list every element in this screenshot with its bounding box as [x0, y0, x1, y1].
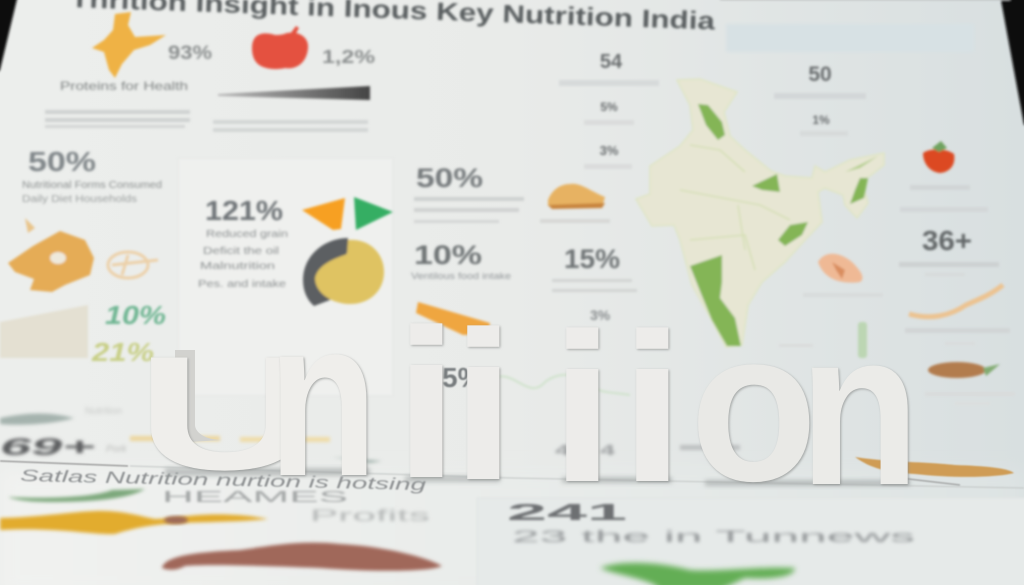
letter U: U: [136, 323, 317, 504]
top column stats: [600, 51, 832, 158]
horizontal paper edge: [0, 461, 1024, 488]
panel: mid strip behind letters: [0, 406, 740, 463]
U inner wall shade: [175, 350, 222, 442]
letter i: i: [620, 290, 685, 527]
panel: central stats: [411, 51, 866, 335]
faded bar chart: [0, 305, 88, 358]
letter i: i: [394, 286, 459, 523]
stat: 121%: 121%: [205, 195, 283, 226]
letter n: n: [268, 272, 377, 522]
stat: 69+: 69+: [0, 434, 95, 461]
icon: green shape: [600, 563, 795, 585]
panel: mid strip behind letters: Pork: [106, 444, 128, 455]
panel: top apple stat: [213, 26, 375, 132]
stat: 36+: 36+: [922, 225, 972, 256]
top column stats: 1%: [812, 113, 830, 127]
icon: faded pastry: [108, 252, 158, 278]
letter i: i: [550, 290, 615, 527]
panel: right column: [590, 141, 1015, 405]
lower text: caption: 23 the in Tunnews: [512, 527, 915, 546]
bullet list: [198, 228, 288, 290]
stat: 10% green: 10%: [105, 300, 166, 330]
orange carrot: [416, 302, 490, 335]
donut chart: [303, 238, 384, 306]
icon: faded orange food: [818, 254, 862, 283]
lower text: headline: Satlas Nutrition nurtion is hotsing: [20, 466, 427, 494]
icon: green wedge: [354, 197, 393, 230]
panel: lower paper: [0, 466, 1024, 585]
letter n: n: [799, 286, 920, 531]
icon: red apple: [252, 33, 308, 69]
stat: 50%: 50%: [28, 146, 96, 177]
tapered bar: [218, 86, 370, 100]
small green bar: [858, 322, 867, 358]
panel: center 121% card: [178, 158, 393, 396]
icon: orange wedge: [302, 198, 345, 230]
top column stats: 3%: [600, 143, 619, 158]
letter o: o: [690, 285, 817, 526]
stat: 1,2%: 1,2%: [322, 47, 375, 67]
stat: 15%: 15%: [564, 244, 620, 274]
green states: [690, 104, 878, 346]
stat: 21% lime: 21%: [91, 337, 154, 367]
orange curve: [909, 285, 1003, 317]
3D word: letters standing on the page: [136, 272, 920, 531]
bullet list: Pes. and intake: [198, 278, 286, 290]
panel: left 50% block: Daily Diet Households: [22, 194, 137, 205]
letter i: i: [451, 288, 516, 525]
chart: India map: [636, 79, 884, 347]
icon: brown shape: [162, 543, 442, 571]
top column stats: 5%: [600, 100, 618, 114]
top column stats: 50: [808, 63, 832, 86]
panel: top left map stat: [45, 12, 212, 128]
icon: orange food: [8, 231, 94, 292]
stat: 241: 241: [507, 499, 628, 525]
bullet list: Deficit the oil: [203, 245, 279, 257]
icon: brown carrot: [928, 362, 986, 378]
panel: left 50% block: [0, 146, 166, 367]
panel: mid strip behind letters: 4.5 4: [555, 442, 616, 459]
icon: bread: [548, 184, 605, 207]
panel: mid strip behind letters: Nutrition: [85, 406, 122, 417]
small stat: 3%: [590, 307, 611, 323]
contact shadows: [165, 468, 910, 486]
bullet list: Reduced grain: [206, 228, 288, 240]
header tinted band: [726, 24, 974, 52]
panel: central stats: Ventilous food intake: [411, 271, 511, 282]
orange brown map sliver: [855, 457, 1014, 477]
bullet list: Malnutrition: [200, 260, 275, 272]
text lines: [414, 197, 524, 201]
icon: green leaf: [8, 489, 145, 502]
stat: 93%: 93%: [168, 43, 212, 64]
lower text: HEAMES: HEAMES: [162, 489, 348, 506]
stat: 10%: 10%: [414, 240, 482, 270]
dark table corners: [0, 0, 1024, 125]
icon: yellow stripe: [0, 511, 268, 534]
lower text: Profits: Profits: [310, 506, 430, 525]
stat: 50%: 50%: [416, 163, 483, 193]
green line chart: [498, 375, 630, 395]
top column stats: 54: [600, 51, 623, 73]
text lines: Nutritional Forms Consumed: [22, 180, 162, 191]
text lines: Proteins for Health: [60, 79, 188, 93]
stat: partial 5%: 5%: [442, 362, 483, 393]
icon: orange India map: [92, 12, 166, 78]
icon: tomato: [923, 149, 954, 173]
